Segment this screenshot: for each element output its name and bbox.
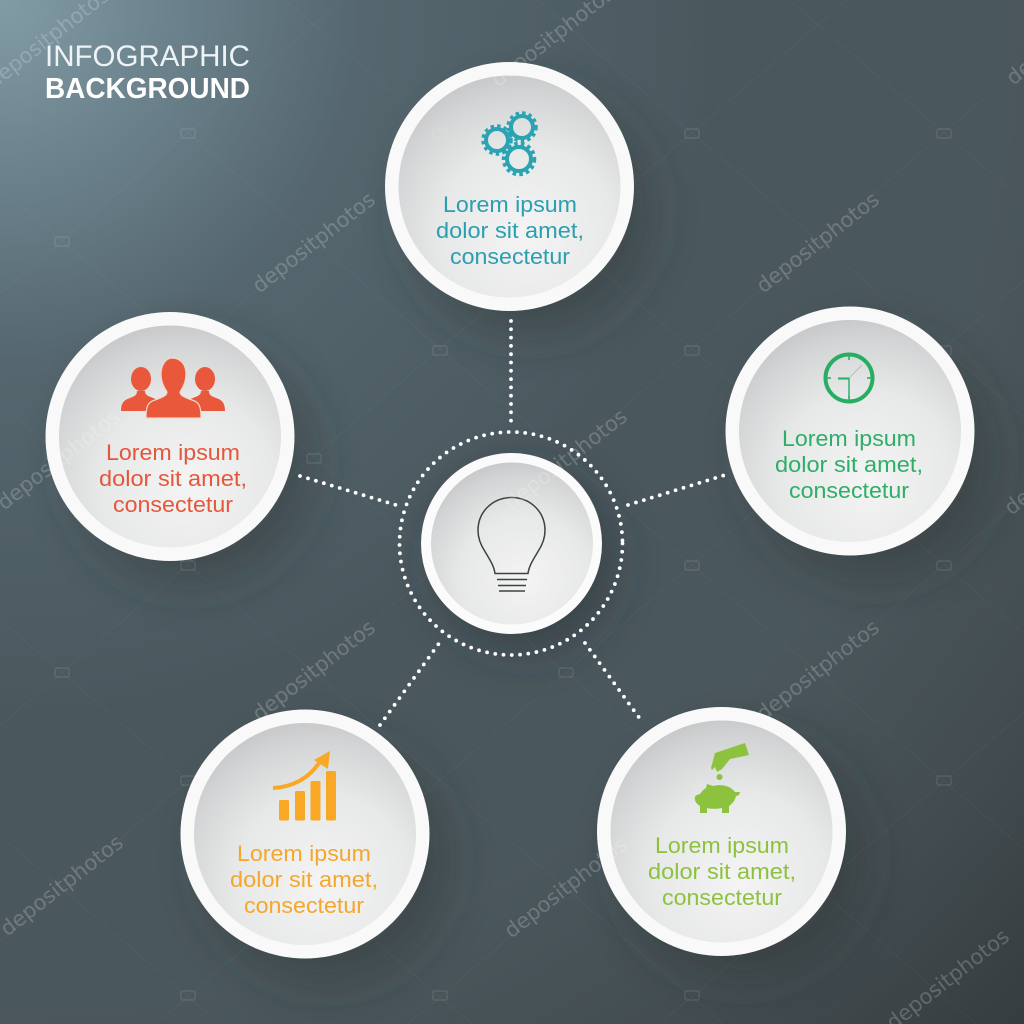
connector: right <box>628 475 725 505</box>
text: top label: Lorem ipsum <box>443 192 577 217</box>
watermarks: depositphotos <box>752 615 884 726</box>
text: bottom left label: dolor sit amet, <box>230 867 378 892</box>
icon: rising bar chart <box>273 751 336 820</box>
text: left label: dolor sit amet, <box>99 466 247 491</box>
connector: left <box>300 476 396 505</box>
panel: bottom right, savings <box>597 707 865 979</box>
icon: gears <box>483 113 536 174</box>
text: right label: dolor sit amet, <box>775 452 923 477</box>
panel: top, settings <box>385 62 652 334</box>
title: INFOGRAPHIC <box>45 40 250 73</box>
panel: left, team <box>46 312 313 584</box>
panel: right, clock <box>726 306 993 579</box>
watermarks: depositphotos <box>500 404 632 515</box>
title <box>45 40 250 105</box>
connector: bottom right <box>585 643 643 723</box>
icon: hand and piggy bank <box>694 743 749 813</box>
text: left label: Lorem ipsum <box>106 440 240 465</box>
text: right label <box>775 426 923 503</box>
icon: clock <box>826 354 872 402</box>
text: top label <box>436 192 584 269</box>
text: bottom left label <box>230 841 378 918</box>
connector: top <box>509 321 513 425</box>
connector: bottom left <box>380 642 440 725</box>
text: right label: consectetur <box>789 478 909 503</box>
text: bottom right label: Lorem ipsum <box>655 833 789 858</box>
watermarks: depositphotos <box>248 615 380 726</box>
icon: light bulb <box>478 498 545 591</box>
dotted ring <box>400 432 622 655</box>
text: left label: consectetur <box>113 492 233 517</box>
text: right label: Lorem ipsum <box>782 426 916 451</box>
text: bottom right label: dolor sit amet, <box>648 859 796 884</box>
watermarks: depositphotos <box>500 832 632 943</box>
watermarks: depositphotos <box>248 187 380 298</box>
watermarks: depositphotos <box>752 187 884 298</box>
title: BACKGROUND <box>45 73 250 105</box>
text: bottom left label: Lorem ipsum <box>237 841 371 866</box>
text: bottom left label: consectetur <box>244 893 364 918</box>
text: top label: dolor sit amet, <box>436 218 584 243</box>
text: bottom right label: consectetur <box>662 885 782 910</box>
panel: bottom left, growth <box>180 710 448 982</box>
icon: people <box>121 358 225 418</box>
text: top label: consectetur <box>450 244 570 269</box>
panel: centre, idea <box>421 453 614 650</box>
text: left label <box>99 440 247 517</box>
text: bottom right label <box>648 833 796 910</box>
